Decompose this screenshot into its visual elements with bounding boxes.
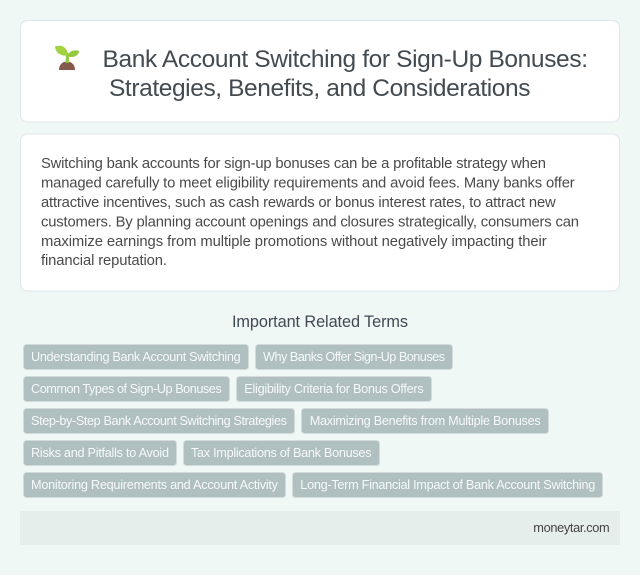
tag: maximizing benefits (302, 408, 548, 434)
tag: common types: Common Types of Sign-Up Bonuses (31, 382, 222, 396)
tag: understanding switching (24, 344, 248, 370)
tag: tax implications: Tax Implications of Bank Bonuses (191, 446, 372, 460)
tag: eligibility criteria: Eligibility Criteria for Bonus Offers (244, 382, 424, 396)
text block: summary: Switching bank accounts for sign-up bonuses can be a profitable strategy when (41, 156, 546, 172)
tag: risks and pitfalls: Risks and Pitfalls to Avoid (31, 446, 169, 460)
text block: summary (41, 156, 579, 269)
tag: monitoring requirements: Monitoring Requirements and Account Activity (31, 478, 279, 492)
icon: seedling (55, 46, 79, 70)
footer credit: moneytar.com (533, 520, 610, 535)
tag: switching strategies (24, 408, 294, 434)
panel: title card (20, 20, 620, 122)
tag: why banks offer (256, 344, 452, 370)
tag: switching strategies: Step-by-Step Bank Account Switching Strategies (31, 414, 287, 428)
tag group: related terms (24, 344, 602, 498)
title (102, 46, 588, 102)
tag: why banks offer: Why Banks Offer Sign-Up Bonuses (263, 350, 445, 364)
tag: risks and pitfalls (24, 440, 176, 466)
text block: summary: customers. By planning account openings and closures strategically, consumers can (41, 214, 579, 230)
tag: eligibility criteria (236, 376, 432, 402)
panel: summary card (20, 134, 620, 291)
tag: tax implications (184, 440, 380, 466)
title: Strategies, Benefits, and Considerations (109, 75, 530, 102)
text block: summary: attractive incentives, such as cash rewards or bonus interest rates, to attract new (41, 195, 556, 211)
text block: summary: financial reputation. (41, 253, 167, 269)
text block: summary: managed carefully to meet eligibility requirements and avoid fees. Many banks offer (41, 176, 575, 192)
title: Bank Account Switching for Sign-Up Bonuses: (102, 46, 588, 73)
footer bar (20, 511, 620, 545)
heading: related terms: Important Related Terms (232, 313, 408, 331)
tag: maximizing benefits: Maximizing Benefits from Multiple Bonuses (310, 414, 541, 428)
tag: long-term impact (292, 472, 602, 498)
tag: understanding switching: Understanding Bank Account Switching (31, 350, 241, 364)
tag: monitoring requirements (24, 472, 286, 498)
tag: long-term impact: Long-Term Financial Impact of Bank Account Switching (300, 478, 595, 492)
tag: common types (24, 376, 230, 402)
text block: summary: maximize earnings from multiple promotions without negatively impacting their (41, 234, 547, 250)
